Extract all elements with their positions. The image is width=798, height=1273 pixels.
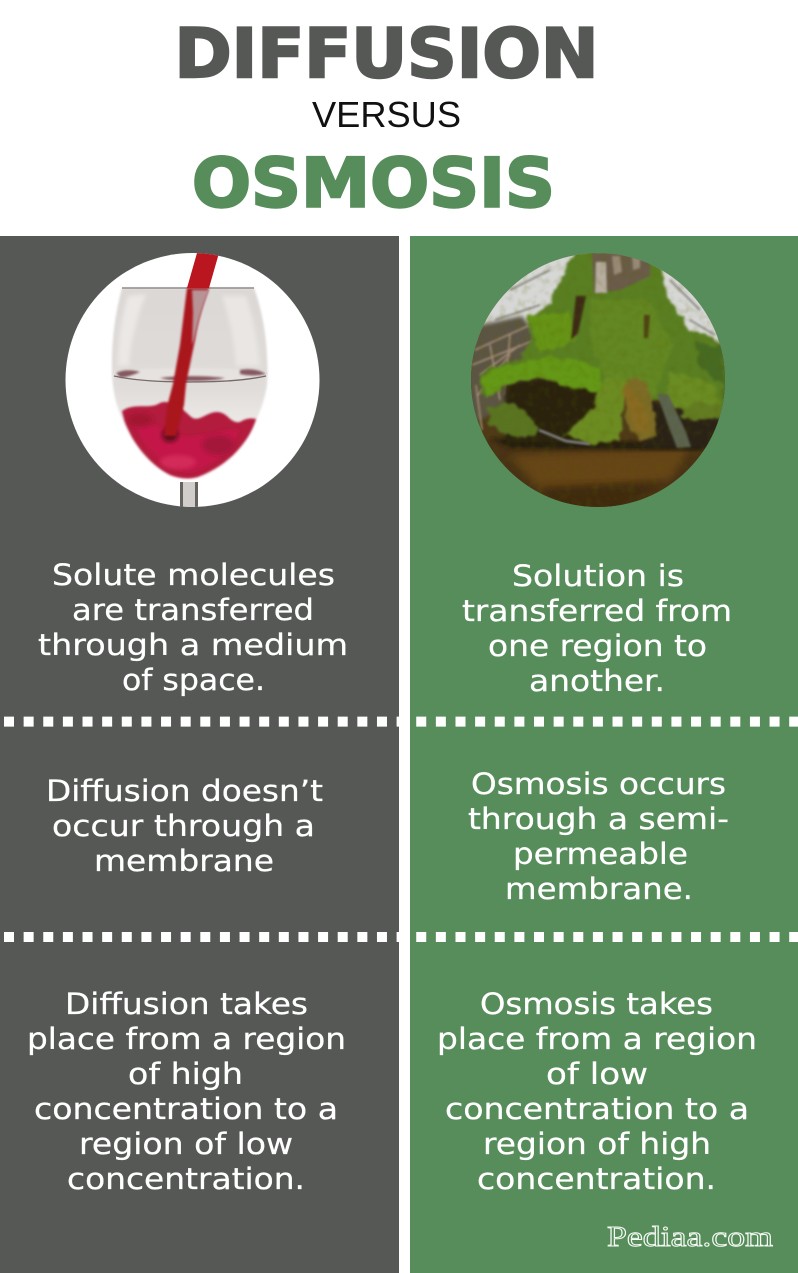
moss mass [482, 253, 724, 444]
title: Diffusion: DIFFUSION [174, 15, 598, 94]
wine swirl [122, 402, 256, 478]
column gutter [399, 236, 410, 1273]
exposed roots [657, 394, 691, 448]
text: osmosis row three: concentration. [477, 1162, 716, 1196]
text: diffusion row three: concentration. [67, 1162, 305, 1196]
icon: mossy tree roots by water [466, 253, 730, 510]
root hollow [502, 378, 598, 440]
text: osmosis row three: place from a region [437, 1022, 757, 1056]
text: diffusion row three: of high [128, 1057, 243, 1091]
central and lower roots [566, 378, 625, 444]
logo: Pediaa.com: Pediaa.com [607, 1221, 774, 1253]
panel: osmosis background [410, 236, 798, 1273]
text: osmosis row one: Solution is [512, 559, 684, 593]
text: diffusion row three: concentration to a [34, 1092, 338, 1126]
divider: row two [4, 932, 798, 942]
wine stream [164, 288, 209, 436]
text: osmosis row two: Osmosis occurs [471, 767, 726, 801]
text: diffusion row two: Diffusion doesn’t [46, 774, 323, 808]
icon: wine diffusing in a glass of water [65, 253, 320, 507]
text: osmosis row two [468, 767, 729, 906]
text: osmosis row one: one region to [488, 629, 707, 663]
text: diffusion row three: Diffusion takes [65, 987, 308, 1021]
bark [592, 253, 650, 293]
text: diffusion row two: membrane [94, 844, 274, 878]
water surface [113, 368, 267, 382]
text: diffusion row three: place from a region [27, 1022, 346, 1056]
text: osmosis row two: membrane. [505, 872, 693, 906]
panel: diffusion background [0, 236, 399, 1273]
dry grass bank [471, 314, 536, 422]
text: osmosis row three: of low [546, 1057, 648, 1091]
text: diffusion row three [27, 987, 346, 1196]
text: osmosis row three: region of high [483, 1127, 711, 1161]
text: osmosis row two: through a semi- [468, 802, 729, 836]
text: diffusion row one: are transferred [72, 593, 314, 627]
right bank [681, 338, 725, 420]
text: osmosis row three: concentration to a [445, 1092, 749, 1126]
text: diffusion row one: Solute molecules [52, 558, 335, 592]
moss speckle [470, 253, 726, 507]
text: osmosis row one: another. [529, 664, 665, 698]
text: osmosis row three: Osmosis takes [480, 987, 713, 1021]
text: osmosis row three [437, 987, 757, 1196]
text: diffusion row three: region of low [79, 1127, 293, 1161]
text: diffusion row two: occur through a [52, 809, 315, 843]
text: osmosis row one [462, 559, 732, 698]
text: diffusion row one: through a medium [38, 628, 348, 662]
text: diffusion row one: of space. [122, 663, 265, 697]
text: diffusion row two [46, 774, 323, 878]
divider: row one [4, 717, 798, 727]
snowy ground [470, 253, 726, 345]
glass stem [183, 482, 195, 507]
title: Osmosis: OSMOSIS [192, 144, 555, 224]
text: osmosis row one: transferred from [462, 594, 732, 628]
text: diffusion row one [38, 558, 348, 697]
subtitle: versus: VERSUS [312, 94, 461, 135]
text: osmosis row two: permeable [513, 837, 688, 871]
water and mud [486, 440, 710, 507]
